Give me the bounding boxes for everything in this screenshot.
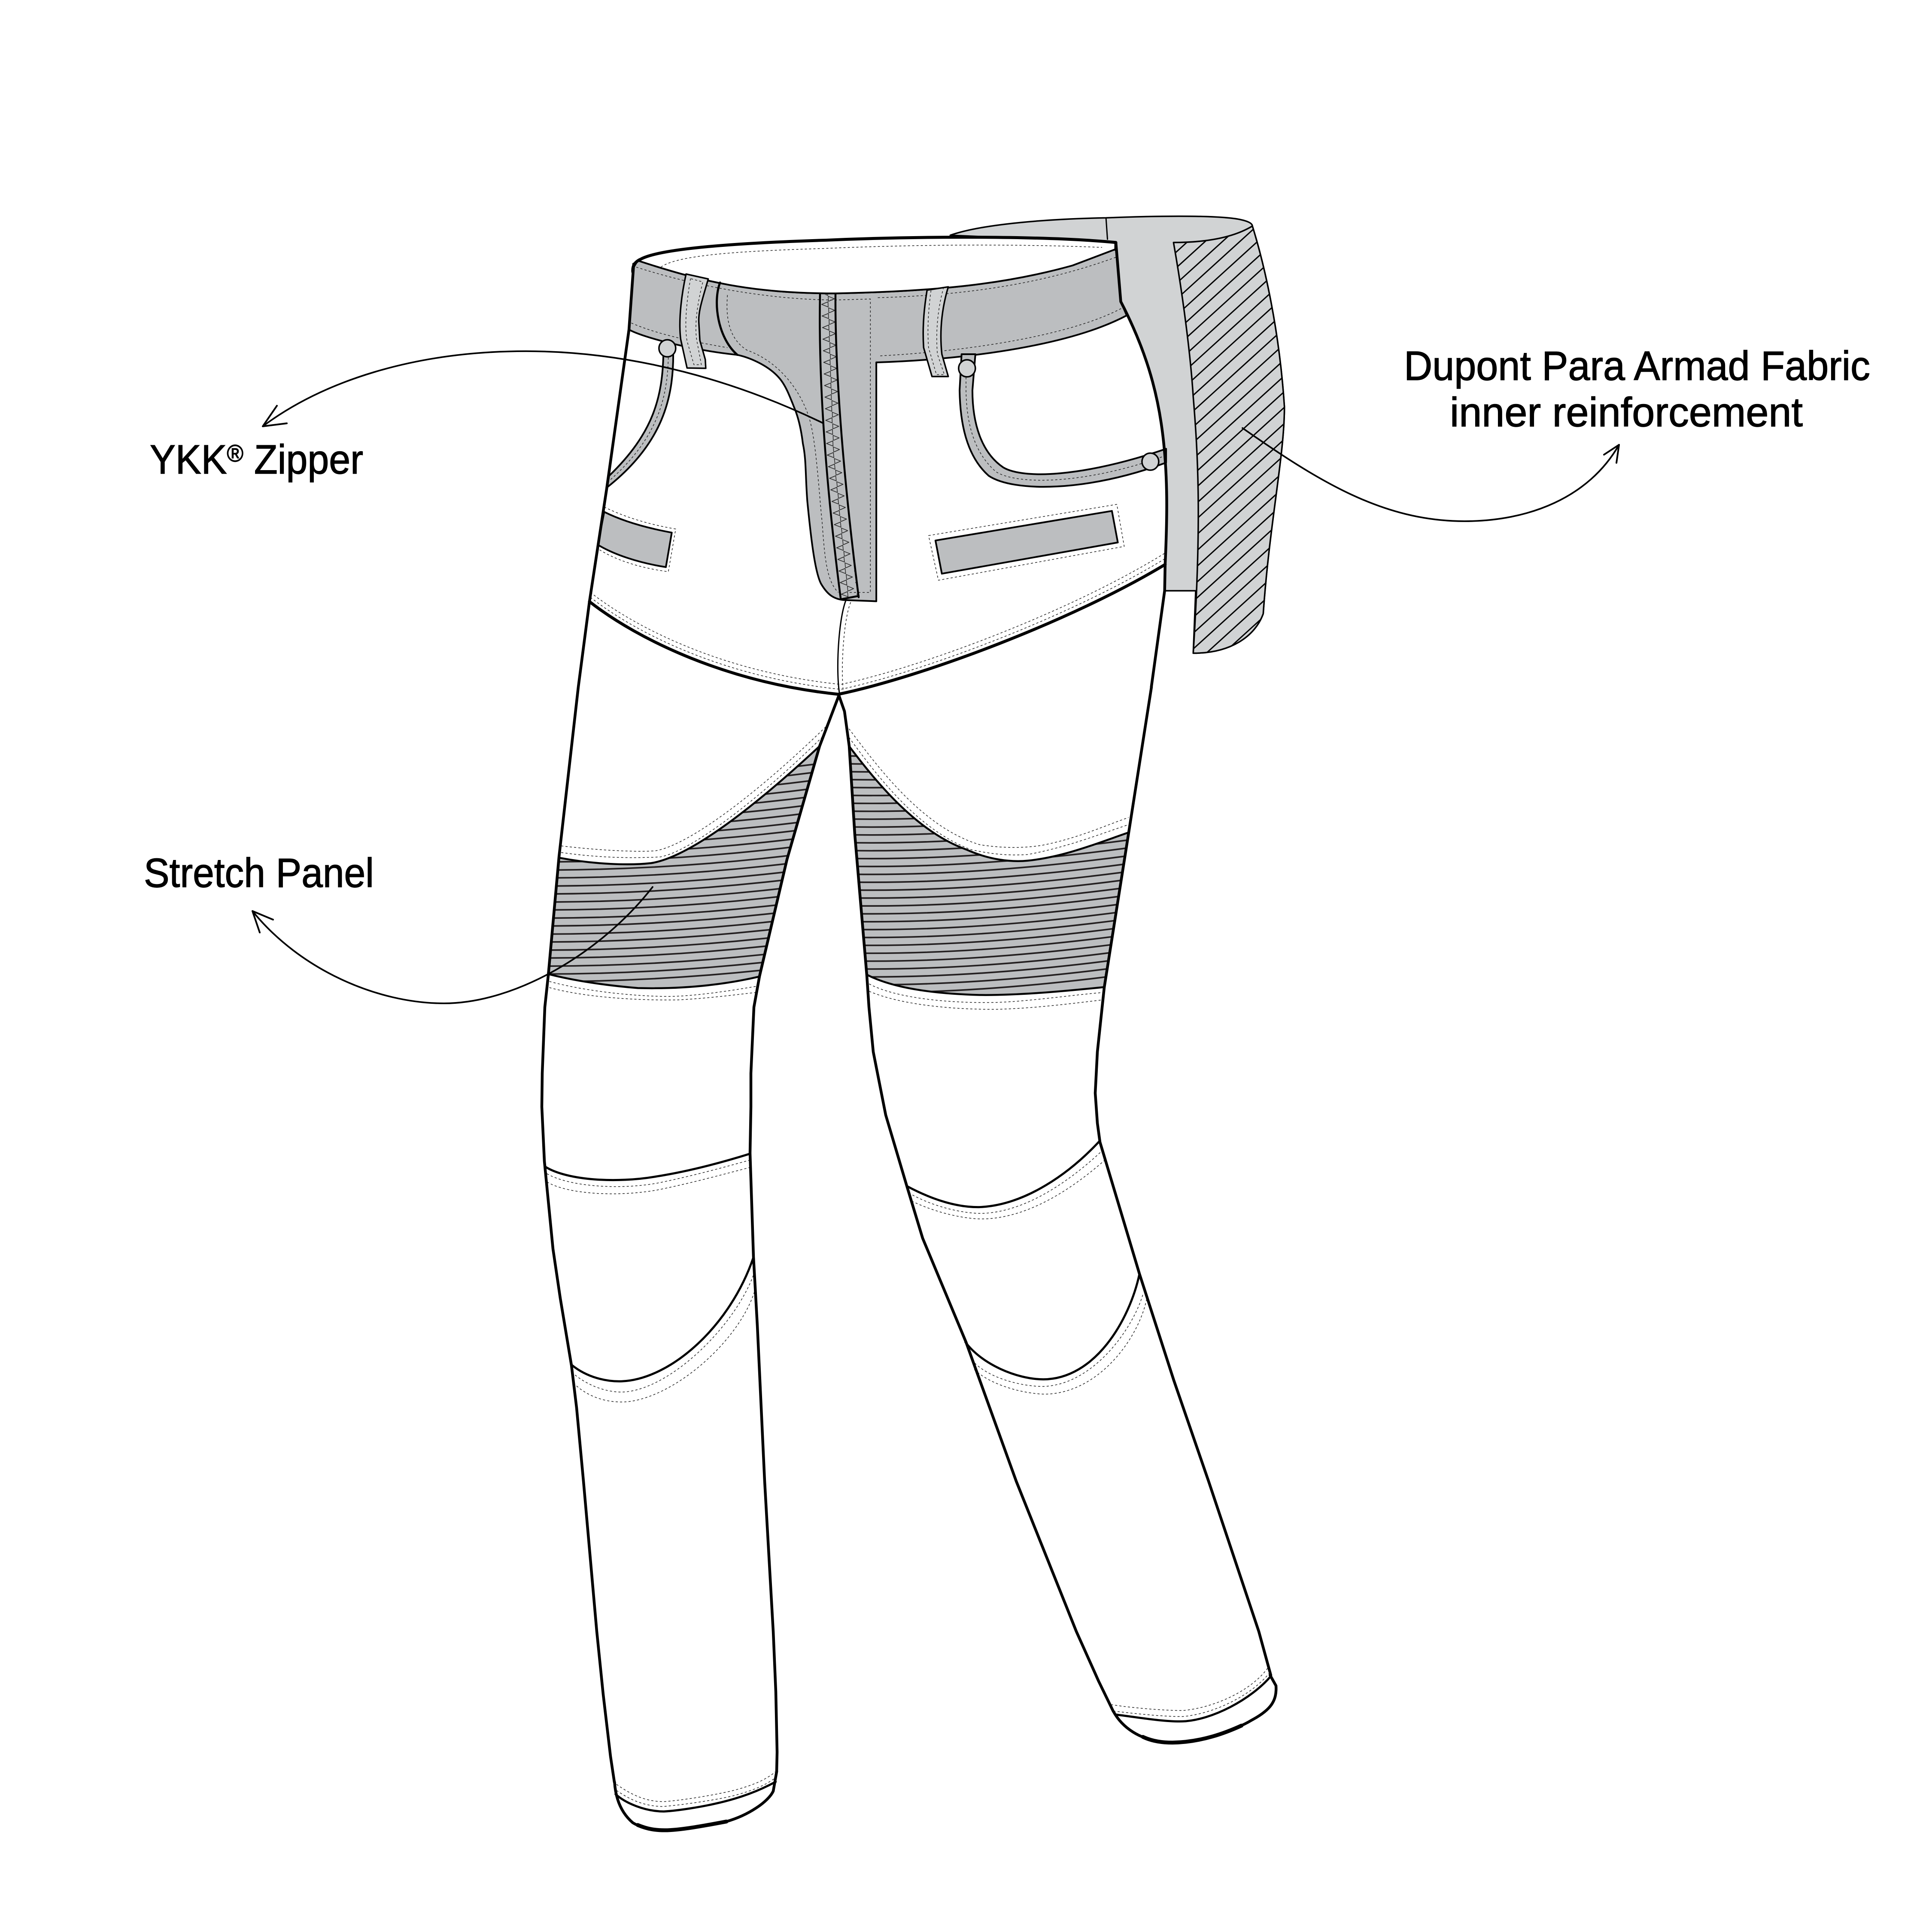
right lower knee seam <box>966 1274 1147 1394</box>
zipper teeth <box>821 295 857 597</box>
label: aramid fabric: inner reinforcement <box>1450 389 1803 435</box>
left leg outer edge <box>542 264 634 1782</box>
label: YKK zipper: Zipper <box>243 437 363 483</box>
left welt pocket <box>597 507 676 572</box>
stretch panels <box>541 726 1129 1009</box>
right stretch panel <box>848 729 1129 1009</box>
center seam <box>838 601 851 693</box>
light grey inner lining <box>950 216 1285 653</box>
knee seams <box>546 1142 1147 1402</box>
label: stretch panel: Stretch Panel <box>144 850 374 896</box>
label: aramid fabric <box>1404 343 1870 435</box>
right hem <box>1111 1667 1276 1743</box>
left leg inner edge <box>750 694 839 1771</box>
right leg outer edge <box>1095 687 1271 1675</box>
leg outlines <box>542 264 1271 1782</box>
left lower knee seam <box>571 1257 755 1402</box>
right pocket piping <box>960 354 1166 487</box>
label: aramid fabric: Dupont Para Armad Fabric <box>1404 343 1870 389</box>
right leg inner edge <box>838 694 1113 1711</box>
arrow: YKK zipper <box>263 351 823 426</box>
right welt pocket <box>929 504 1124 580</box>
hip outline <box>1116 243 1167 687</box>
waist, fly, pockets <box>589 237 1167 694</box>
arrow: stretch panel <box>252 887 653 1003</box>
arrow: aramid reinforcement <box>1242 428 1619 521</box>
left upper knee seam <box>546 1154 750 1194</box>
right pocket rivets <box>959 360 1159 470</box>
yoke seam <box>589 553 1165 694</box>
label: YKK zipper: YKK <box>150 437 232 483</box>
hems <box>614 1667 1276 1830</box>
left stretch panel <box>541 726 839 1000</box>
label: YKK zipper: ® <box>227 440 243 467</box>
back reinforcement panel <box>950 216 1285 654</box>
waistband stitching <box>632 257 1122 592</box>
waistband and fly panel <box>629 249 1127 601</box>
left pocket piping <box>607 354 673 487</box>
zipper tape edges <box>820 295 859 599</box>
zipper <box>819 294 860 599</box>
belt loop right <box>923 287 948 377</box>
belt loop left <box>680 274 708 368</box>
left hem <box>614 1771 777 1830</box>
right upper knee seam <box>907 1142 1105 1219</box>
hatched aramid fabric <box>1173 226 1285 654</box>
waist opening <box>638 237 1116 293</box>
left pocket rivet <box>659 340 676 357</box>
pants illustration <box>541 117 1289 1830</box>
